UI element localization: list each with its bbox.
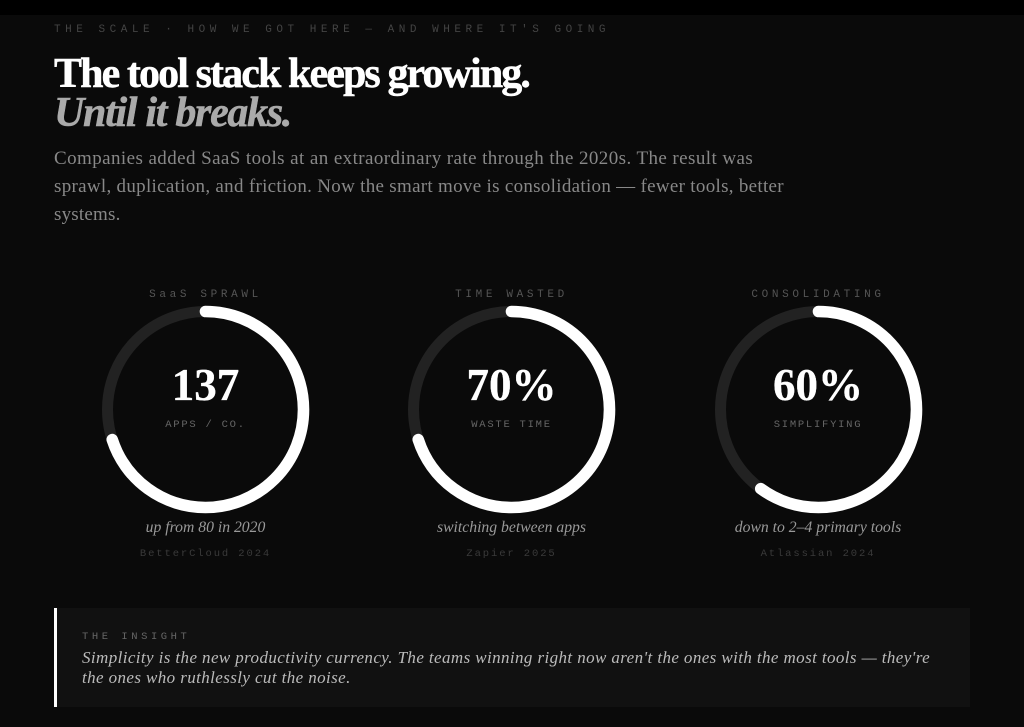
intro paragraph: systems. — [54, 204, 121, 225]
stat unit: APPS / CO. — [165, 419, 246, 431]
stat label: SaaS SPRAWL — [149, 289, 262, 301]
callout text: Simplicity is the new productivity currency. The teams winning right now aren't the ones with the most tools — they're — [82, 648, 930, 667]
intro paragraph: Companies added SaaS tools at an extraordinary rate through the 2020s. The result was — [54, 148, 753, 169]
stat value: 70% — [466, 360, 556, 410]
callout text — [82, 648, 930, 686]
stat unit: WASTE TIME — [471, 419, 552, 431]
stat description: switching between apps — [437, 519, 586, 536]
panel: consolidating stat — [715, 289, 922, 560]
stat label: TIME WASTED — [455, 289, 568, 301]
ring chart: 70 percent — [102, 306, 310, 514]
eyebrow label: THE SCALE · HOW WE GOT HERE — AND WHERE IT'S GOING — [54, 24, 610, 36]
callout text: the ones who ruthlessly cut the noise. — [82, 668, 351, 686]
callout heading: THE INSIGHT — [82, 631, 190, 643]
title: Until it breaks. — [54, 90, 291, 136]
panel: the insight callout — [54, 608, 970, 707]
panel: SaaS sprawl stat — [102, 289, 310, 560]
stat value: 60% — [773, 360, 863, 410]
stat description: up from 80 in 2020 — [146, 519, 265, 536]
ring chart: 60 percent — [715, 306, 922, 514]
callout accent bar — [54, 608, 57, 707]
stat unit: SIMPLIFYING — [774, 419, 862, 431]
stat description: down to 2–4 primary tools — [735, 519, 901, 536]
stat source: Zapier 2025 — [466, 548, 557, 560]
intro paragraph: sprawl, duplication, and friction. Now the smart move is consolidation — fewer tools, better — [54, 176, 784, 197]
ring chart: 70 percent — [408, 306, 616, 514]
title — [54, 51, 530, 136]
panel: time wasted stat — [408, 289, 616, 560]
stat value: 137 — [172, 360, 239, 410]
title: The tool stack keeps growing. — [54, 51, 529, 97]
stat source: BetterCloud 2024 — [140, 548, 271, 560]
stat label: CONSOLIDATING — [751, 289, 885, 301]
stat source: Atlassian 2024 — [761, 548, 875, 560]
intro paragraph — [54, 148, 784, 225]
